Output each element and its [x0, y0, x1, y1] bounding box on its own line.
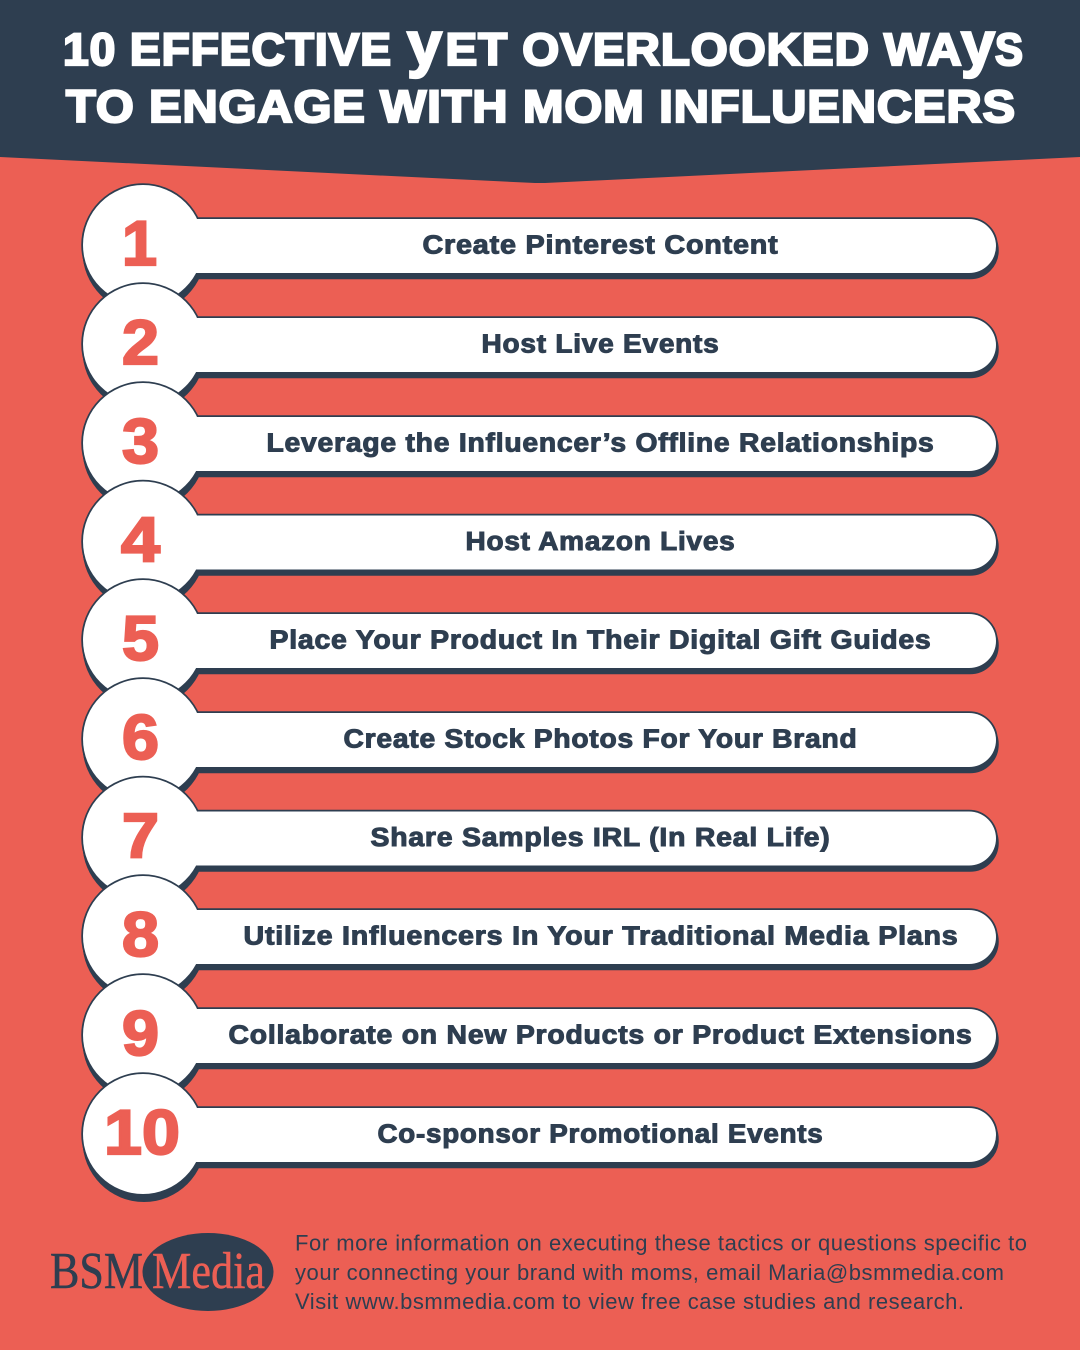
title: TO ENGAGE WITH MOM INFLUENCERS [66, 81, 1016, 132]
footer text: For more information on executing these tactics or questions specific to [295, 1230, 1027, 1256]
list item 5: 5 [122, 604, 159, 674]
footer text: Visit www.bsmmedia.com to view free case studies and research. [295, 1289, 964, 1314]
logo: BSM Media: BSM [50, 1243, 143, 1300]
list item 7: 7 [122, 802, 159, 872]
footer text [295, 1230, 1027, 1314]
title: 10 EFFECTIVE [63, 24, 392, 75]
list item 3: 3 [122, 407, 159, 477]
list item 4 [82, 482, 997, 610]
list item 9: 9 [122, 999, 159, 1069]
list item 2: Host Live Events [482, 330, 720, 358]
title: S [995, 24, 1023, 75]
title [63, 10, 1023, 132]
list item 2: 2 [122, 308, 159, 378]
list item 5 [82, 580, 997, 708]
list item 9 [82, 975, 997, 1103]
list item 8 [82, 876, 997, 1004]
list item 1 [82, 185, 997, 313]
title: y [407, 10, 443, 79]
logo: BSM Media [50, 1233, 274, 1311]
logo: BSM Media: Media [152, 1243, 265, 1300]
title: y [961, 10, 996, 79]
list item 7: Share Samples IRL (In Real Life) [370, 824, 830, 852]
list item 10: Co-sponsor Promotional Events [378, 1120, 824, 1148]
list item 10: 10 [104, 1098, 180, 1168]
list item 2 [82, 284, 997, 412]
list item 10 [82, 1074, 997, 1202]
header banner [0, 0, 1080, 183]
list item 4: 4 [121, 506, 160, 576]
list item 5: Place Your Product In Their Digital Gift Guides [270, 626, 932, 654]
list item 1: Create Pinterest Content [422, 232, 778, 260]
list item 3: Leverage the Influencer’s Offline Relationships [266, 430, 934, 458]
list item 1: 1 [122, 209, 157, 279]
list item 3 [82, 383, 997, 511]
list item 8: 8 [122, 900, 159, 970]
list item 8: Utilize Influencers In Your Traditional Media Plans [244, 922, 958, 950]
list item 6 [82, 679, 997, 807]
list item 6: Create Stock Photos For Your Brand [344, 726, 858, 754]
list item 9: Collaborate on New Products or Product Extensions [228, 1022, 972, 1050]
title: ET OVERLOOKED WA [446, 24, 962, 75]
list item 6: 6 [122, 703, 159, 773]
footer text: your connecting your brand with moms, email Maria@bsmmedia.com [295, 1260, 1004, 1285]
list item 7 [82, 778, 997, 906]
list item 4: Host Amazon Lives [466, 528, 736, 556]
